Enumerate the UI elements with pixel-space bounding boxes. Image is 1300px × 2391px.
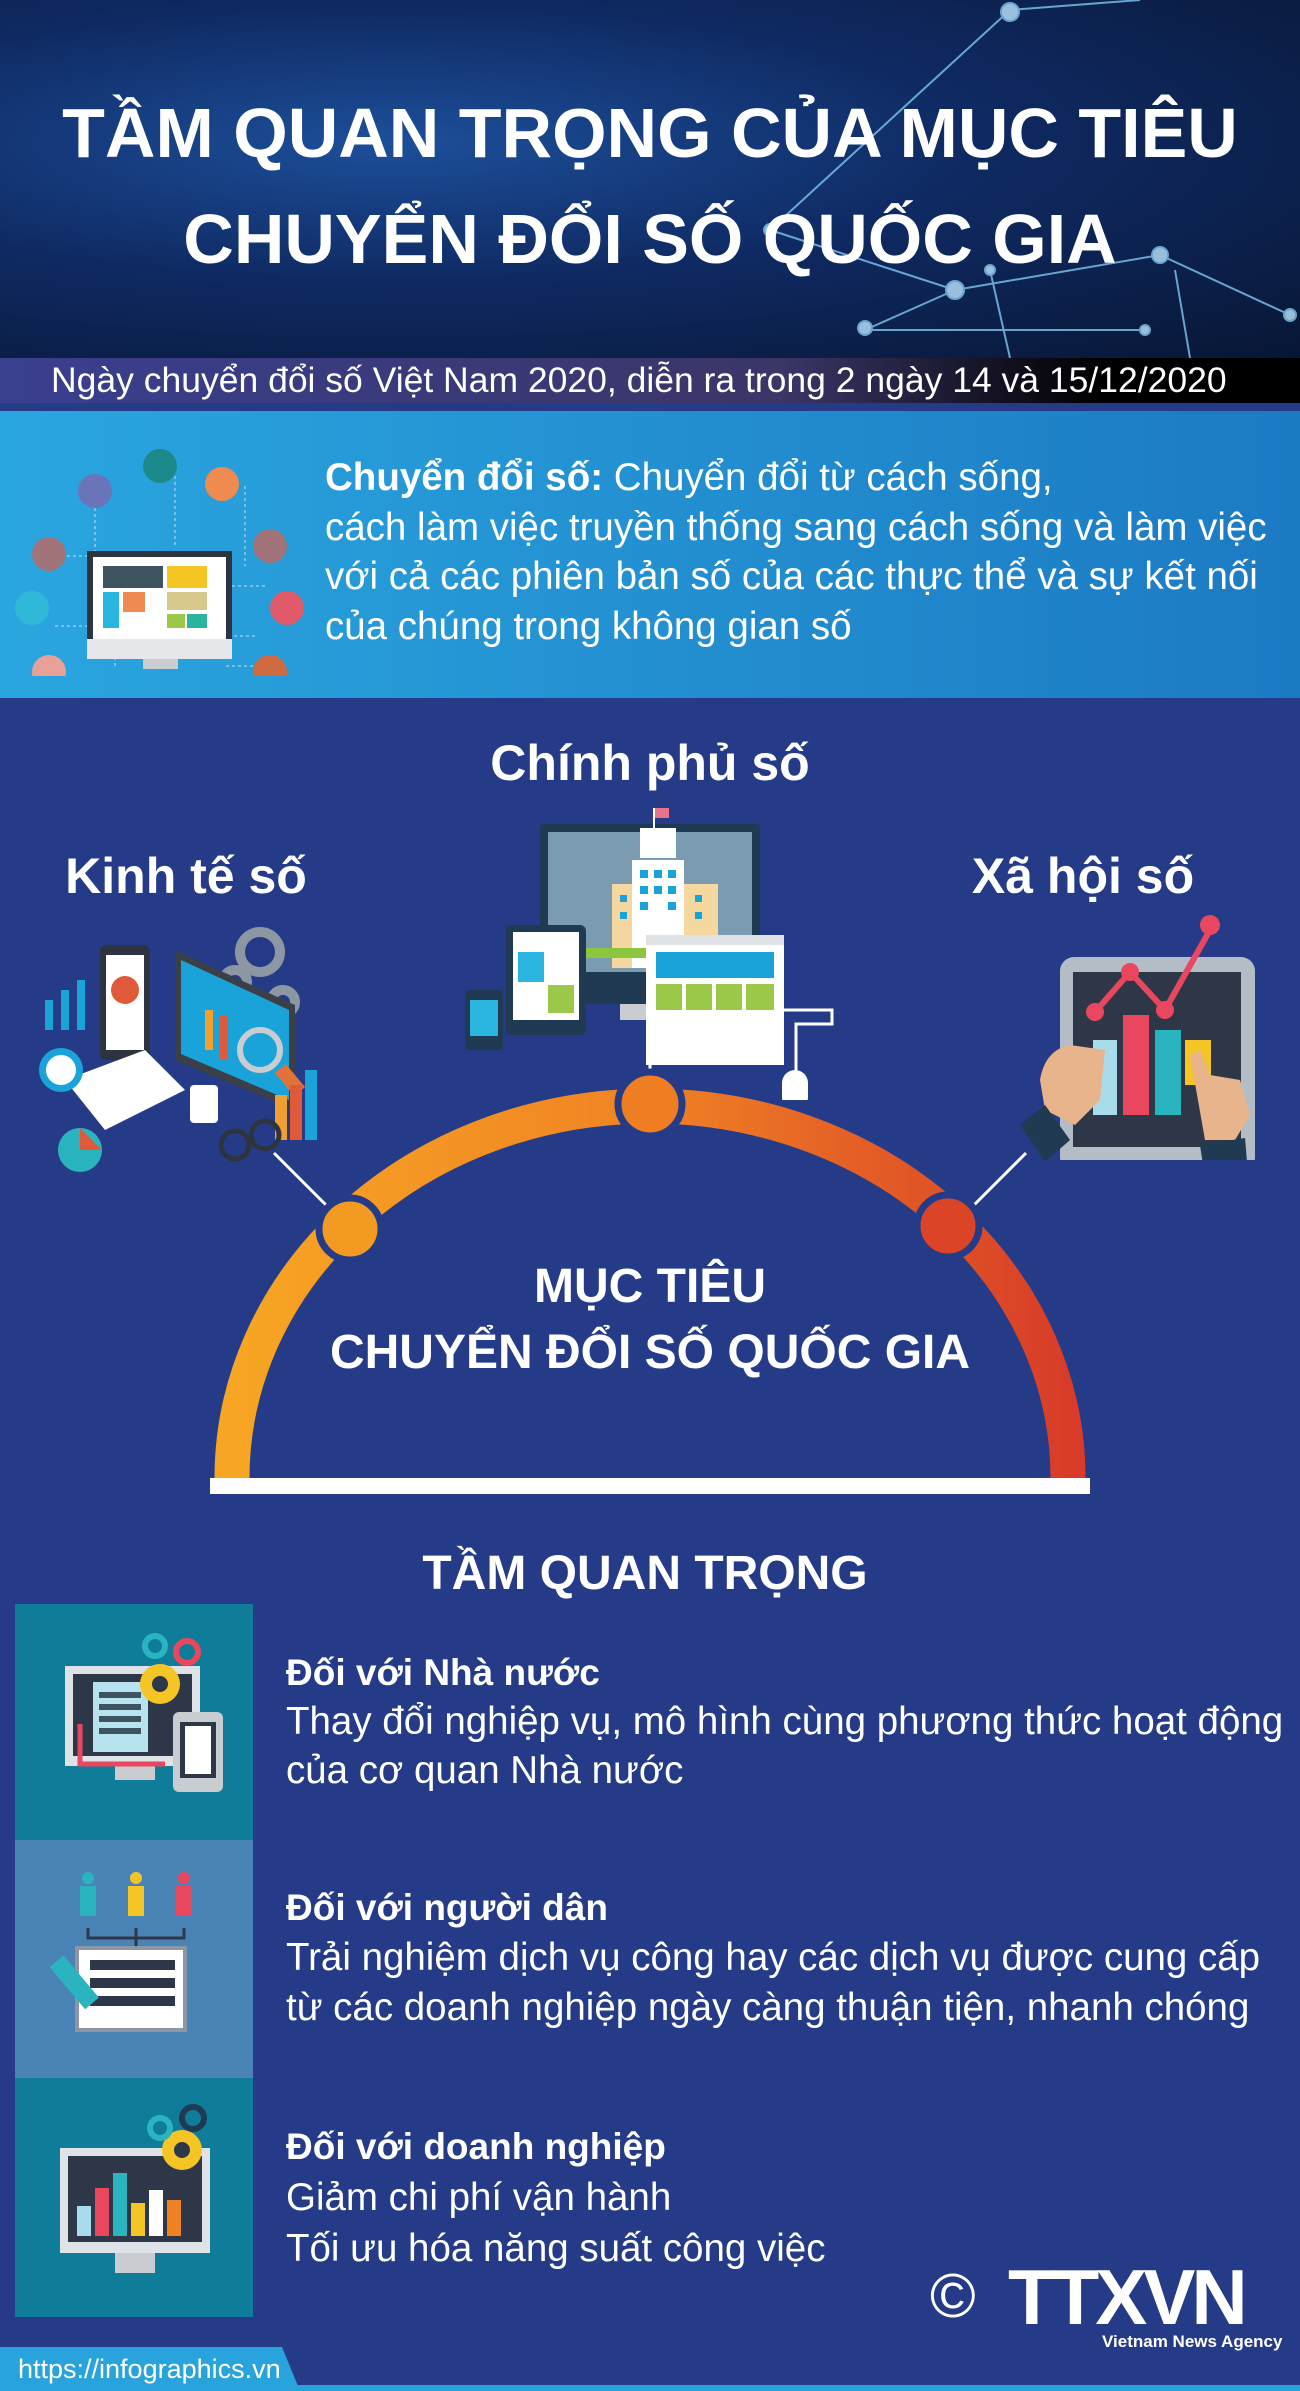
title: TẦM QUAN TRỌNG CỦA MỤC TIÊU <box>62 94 1238 172</box>
header background <box>0 0 1300 358</box>
text: business: Giảm chi phí vận hành <box>286 2176 671 2219</box>
connector lines <box>274 1030 1026 1209</box>
label: Chính phủ số: Chính phủ số <box>490 735 810 791</box>
text: state: Thay đổi nghiệp vụ, mô hình cùng phương thức hoạt động <box>286 1700 1283 1743</box>
icon box: citizens <box>15 1840 253 2078</box>
text: citizens: Trải nghiệm dịch vụ công hay các dịch vụ được cung cấp <box>286 1936 1260 1979</box>
definition text: cách làm việc truyền thống sang cách sống và làm việc <box>325 506 1267 548</box>
row: Nhà nước <box>15 1604 1283 1840</box>
heading: Tầm quan trọng: TẦM QUAN TRỌNG <box>422 1547 868 1600</box>
row: người dân <box>15 1840 1260 2078</box>
text: business: Tối ưu hóa năng suất công việc <box>286 2227 825 2270</box>
subtitle bar: Ngày chuyển đổi số Việt Nam 2020, diễn ra trong 2 ngày 14 và 15/12/2020 <box>51 360 1227 400</box>
definition text: của chúng trong không gian số <box>325 604 852 648</box>
chart: goal arc <box>210 1065 1090 1494</box>
logo: TTXVN: Vietnam News Agency <box>1102 2332 1282 2351</box>
goal text: CHUYỂN ĐỔI SỐ QUỐC GIA <box>330 1326 970 1379</box>
definition text: Chuyển đổi số: Chuyển đổi từ cách sống, <box>325 456 1053 499</box>
logo: TTXVN: © <box>930 2262 976 2331</box>
title <box>62 94 1238 278</box>
text: citizens: Đối với người dân <box>286 1887 608 1928</box>
logo: TTXVN: TTXVN <box>1008 2253 1244 2341</box>
icon: digital network monitor <box>15 449 304 676</box>
text: business: Đối với doanh nghiệp <box>286 2126 666 2167</box>
label: Xã hội số: Xã hội số <box>972 848 1194 904</box>
icon box: business <box>15 2078 253 2317</box>
logo: TTXVN <box>930 2253 1282 2351</box>
icon box: state <box>15 1604 253 1840</box>
text: citizens <box>286 1887 1260 2029</box>
row: doanh nghiệp <box>15 2078 825 2317</box>
text: business <box>286 2126 825 2270</box>
goal text <box>330 1258 970 1379</box>
text: state <box>286 1652 1283 1792</box>
icon: digital society <box>1020 915 1255 1160</box>
definition text: với cả các phiên bản số của các thực thể và sự kết nối <box>325 555 1258 598</box>
footer <box>0 2347 1300 2391</box>
icon: digital government <box>465 808 834 1100</box>
arc nodes <box>319 1072 979 1260</box>
definition text <box>325 456 1267 648</box>
panel: definition <box>0 411 1300 698</box>
text: citizens: từ các doanh nghiệp ngày càng thuận tiện, nhanh chóng <box>286 1986 1249 2029</box>
footer url: https://infographics.vn <box>18 2354 281 2384</box>
icon: digital economy <box>39 927 317 1172</box>
text: state: của cơ quan Nhà nước <box>286 1749 683 1792</box>
text: state: Đối với Nhà nước <box>286 1652 600 1693</box>
title: CHUYỂN ĐỔI SỐ QUỐC GIA <box>183 200 1117 278</box>
label: Kinh tế số: Kinh tế số <box>65 848 307 904</box>
goal text: MỤC TIÊU <box>534 1260 766 1313</box>
